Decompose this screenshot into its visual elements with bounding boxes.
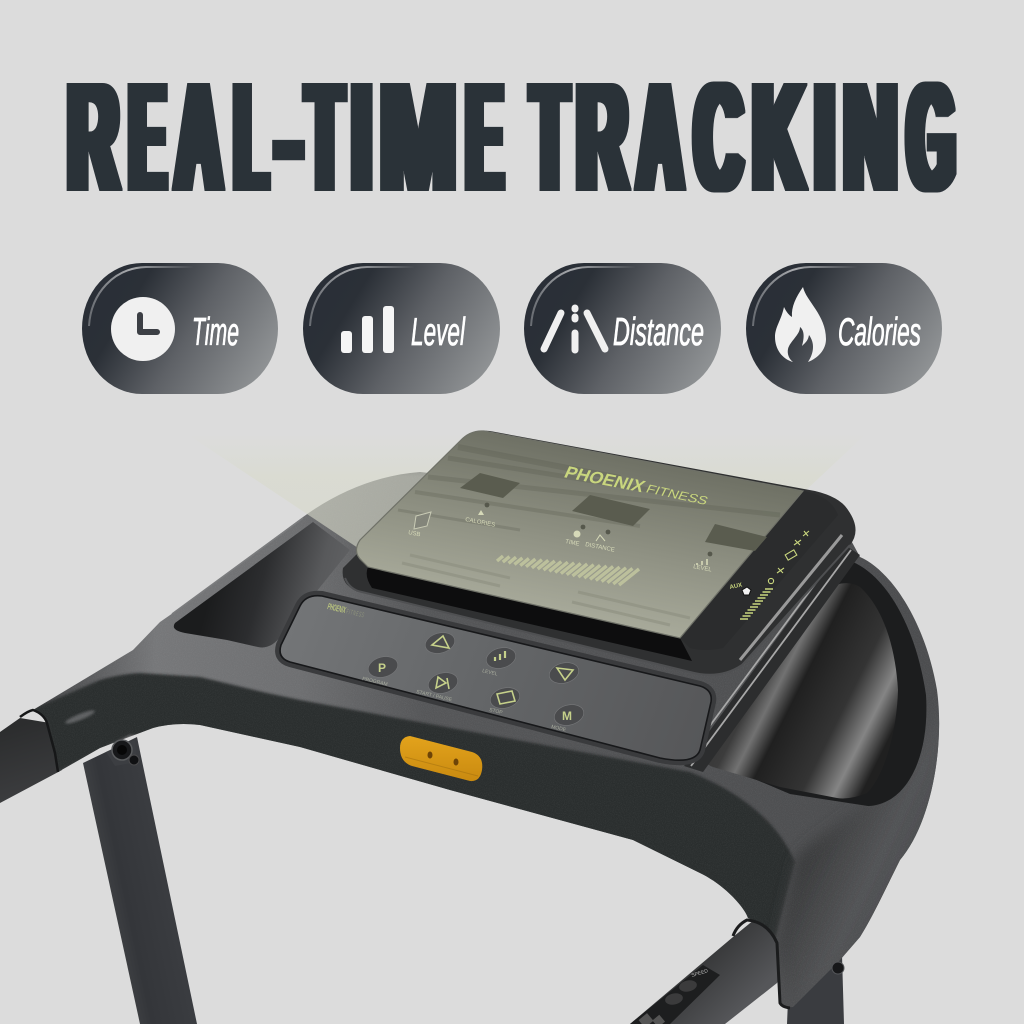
- emergency button: [400, 736, 482, 781]
- display labels: TIME: [565, 539, 580, 548]
- right leg: [787, 955, 844, 1024]
- metal trim lines: [683, 546, 851, 766]
- title: R: [577, 51, 627, 223]
- panel face: [280, 596, 711, 760]
- display labels: [408, 517, 713, 574]
- pill: level: [303, 263, 500, 394]
- left cup holder rim: [172, 518, 303, 614]
- level bar graph: [497, 556, 639, 585]
- pill: time: [82, 263, 278, 394]
- glass overlay: [356, 431, 803, 638]
- button labels: LEVEL: [482, 668, 498, 677]
- glass stripes: [398, 447, 780, 530]
- base rim highlight: [345, 545, 850, 675]
- label: distance: Distance: [613, 311, 704, 354]
- title: A: [176, 51, 221, 223]
- title: I: [815, 51, 835, 223]
- button letters: P: [378, 661, 386, 675]
- left upright post: [83, 737, 197, 1024]
- title: A: [638, 51, 682, 223]
- title: R: [68, 51, 118, 223]
- panel logo: PHOENIXFITNESS: [327, 601, 366, 619]
- button letters: [378, 661, 572, 723]
- post bolts: [106, 740, 139, 766]
- title: E: [130, 51, 164, 223]
- display labels: CALORIES: [465, 517, 496, 529]
- title: T: [307, 51, 342, 223]
- icon: flame: [775, 287, 826, 362]
- label: level: Level: [411, 311, 466, 354]
- right cup holder rim: [700, 558, 926, 806]
- label: calories: Calories: [838, 311, 921, 354]
- speckle texture: [38, 535, 936, 1002]
- button panel: [280, 596, 711, 760]
- display logo subtitle: FITNESS: [644, 482, 711, 508]
- display labels: LEVEL: [693, 564, 713, 574]
- trim strip: [684, 545, 860, 772]
- title: [66, 51, 957, 223]
- black lip: [367, 567, 692, 661]
- lcd windows: [460, 473, 767, 551]
- display labels: USB: [408, 530, 421, 538]
- right collar seam: [733, 920, 790, 1008]
- aux jack: [742, 587, 751, 595]
- icon: clock: [111, 297, 175, 361]
- pill: distance: [524, 263, 721, 394]
- button labels: STOP: [489, 707, 504, 716]
- front dark band: [33, 673, 795, 960]
- button labels: PROGRAM: [362, 676, 388, 688]
- left collar seam: [20, 710, 58, 772]
- buttons: [366, 629, 586, 729]
- title: T: [532, 51, 567, 223]
- title: E: [466, 51, 501, 223]
- safety text lines: [402, 555, 690, 625]
- display console: [343, 431, 856, 675]
- indicator icons: [478, 503, 712, 565]
- button labels: [362, 668, 567, 733]
- button letters: M: [562, 709, 572, 723]
- pill: calories: [746, 263, 942, 394]
- body shading: [34, 535, 940, 1000]
- label: time: Time: [192, 311, 239, 354]
- right outer lobe: [778, 708, 940, 968]
- right handrail tube: [630, 915, 790, 1024]
- icon: level bars: [341, 306, 394, 353]
- title: C: [695, 51, 742, 223]
- leg bolt: [832, 962, 844, 974]
- title: G: [908, 51, 955, 223]
- title: M: [380, 51, 456, 223]
- handrail control pad: SPEED: [691, 968, 709, 979]
- console body: [20, 472, 939, 1007]
- panel rim: [280, 596, 711, 760]
- aux label: AUX: [729, 582, 743, 591]
- icon: road distance: [544, 308, 605, 350]
- collar highlight: [64, 710, 96, 724]
- left cup holder: [174, 522, 350, 647]
- title: I: [352, 51, 372, 223]
- highlight beam from display: [190, 432, 868, 548]
- base side light band: [740, 535, 842, 660]
- right cup holder recess: [704, 583, 898, 798]
- title: K: [753, 51, 804, 223]
- title: -: [275, 51, 302, 223]
- volume bars: [740, 589, 773, 619]
- handrail control pad: [630, 965, 720, 1024]
- usb port: [414, 512, 431, 529]
- treadmill handlebar assembly: [0, 472, 940, 1024]
- button glyphs: [432, 636, 573, 704]
- title: N: [844, 51, 897, 223]
- left handrail tube: [0, 718, 62, 803]
- control end icons: [768, 531, 809, 584]
- display base: [343, 431, 856, 675]
- dark control end: [680, 491, 838, 650]
- display logo: PHOENIX: [561, 462, 649, 496]
- title: L: [234, 51, 266, 223]
- button labels: START / PAUSE: [416, 689, 453, 703]
- button labels: MODE: [551, 724, 567, 733]
- display labels: DISTANCE: [585, 542, 615, 554]
